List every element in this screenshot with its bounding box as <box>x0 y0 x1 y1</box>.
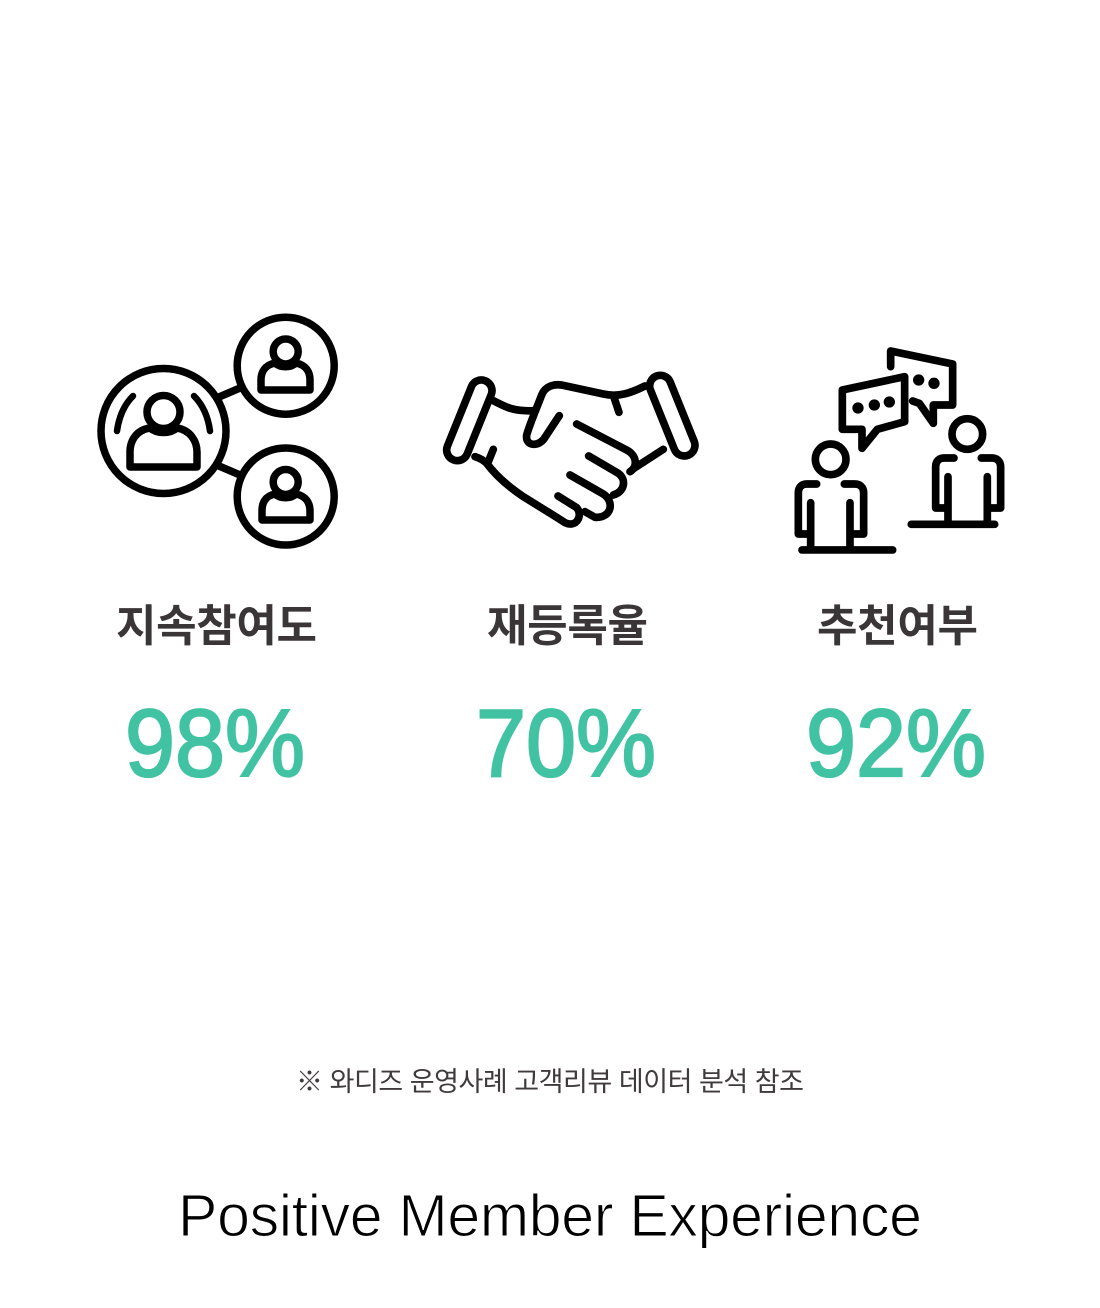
heading: recommendation: 추천여부 <box>817 602 978 651</box>
heading: re-registration rate: 재등록율 <box>487 602 648 651</box>
front speech bubble <box>842 377 905 448</box>
icon: two people talking <box>798 351 1001 550</box>
left person <box>815 444 846 475</box>
footnote: ※ 와디즈 운영사례 고객리뷰 데이터 분석 참조 <box>296 1067 804 1097</box>
stat: 98%: 98% <box>125 690 305 797</box>
stat: 92%: 92% <box>806 690 986 797</box>
title: Positive Member Experience <box>178 1183 922 1249</box>
heading: retention participation: 지속참여도 <box>116 602 317 651</box>
icon: handshake <box>443 372 698 524</box>
back speech bubble <box>891 351 953 423</box>
right person <box>952 419 983 449</box>
icon: connected member network <box>101 317 334 545</box>
stat: 70%: 70% <box>476 690 656 797</box>
